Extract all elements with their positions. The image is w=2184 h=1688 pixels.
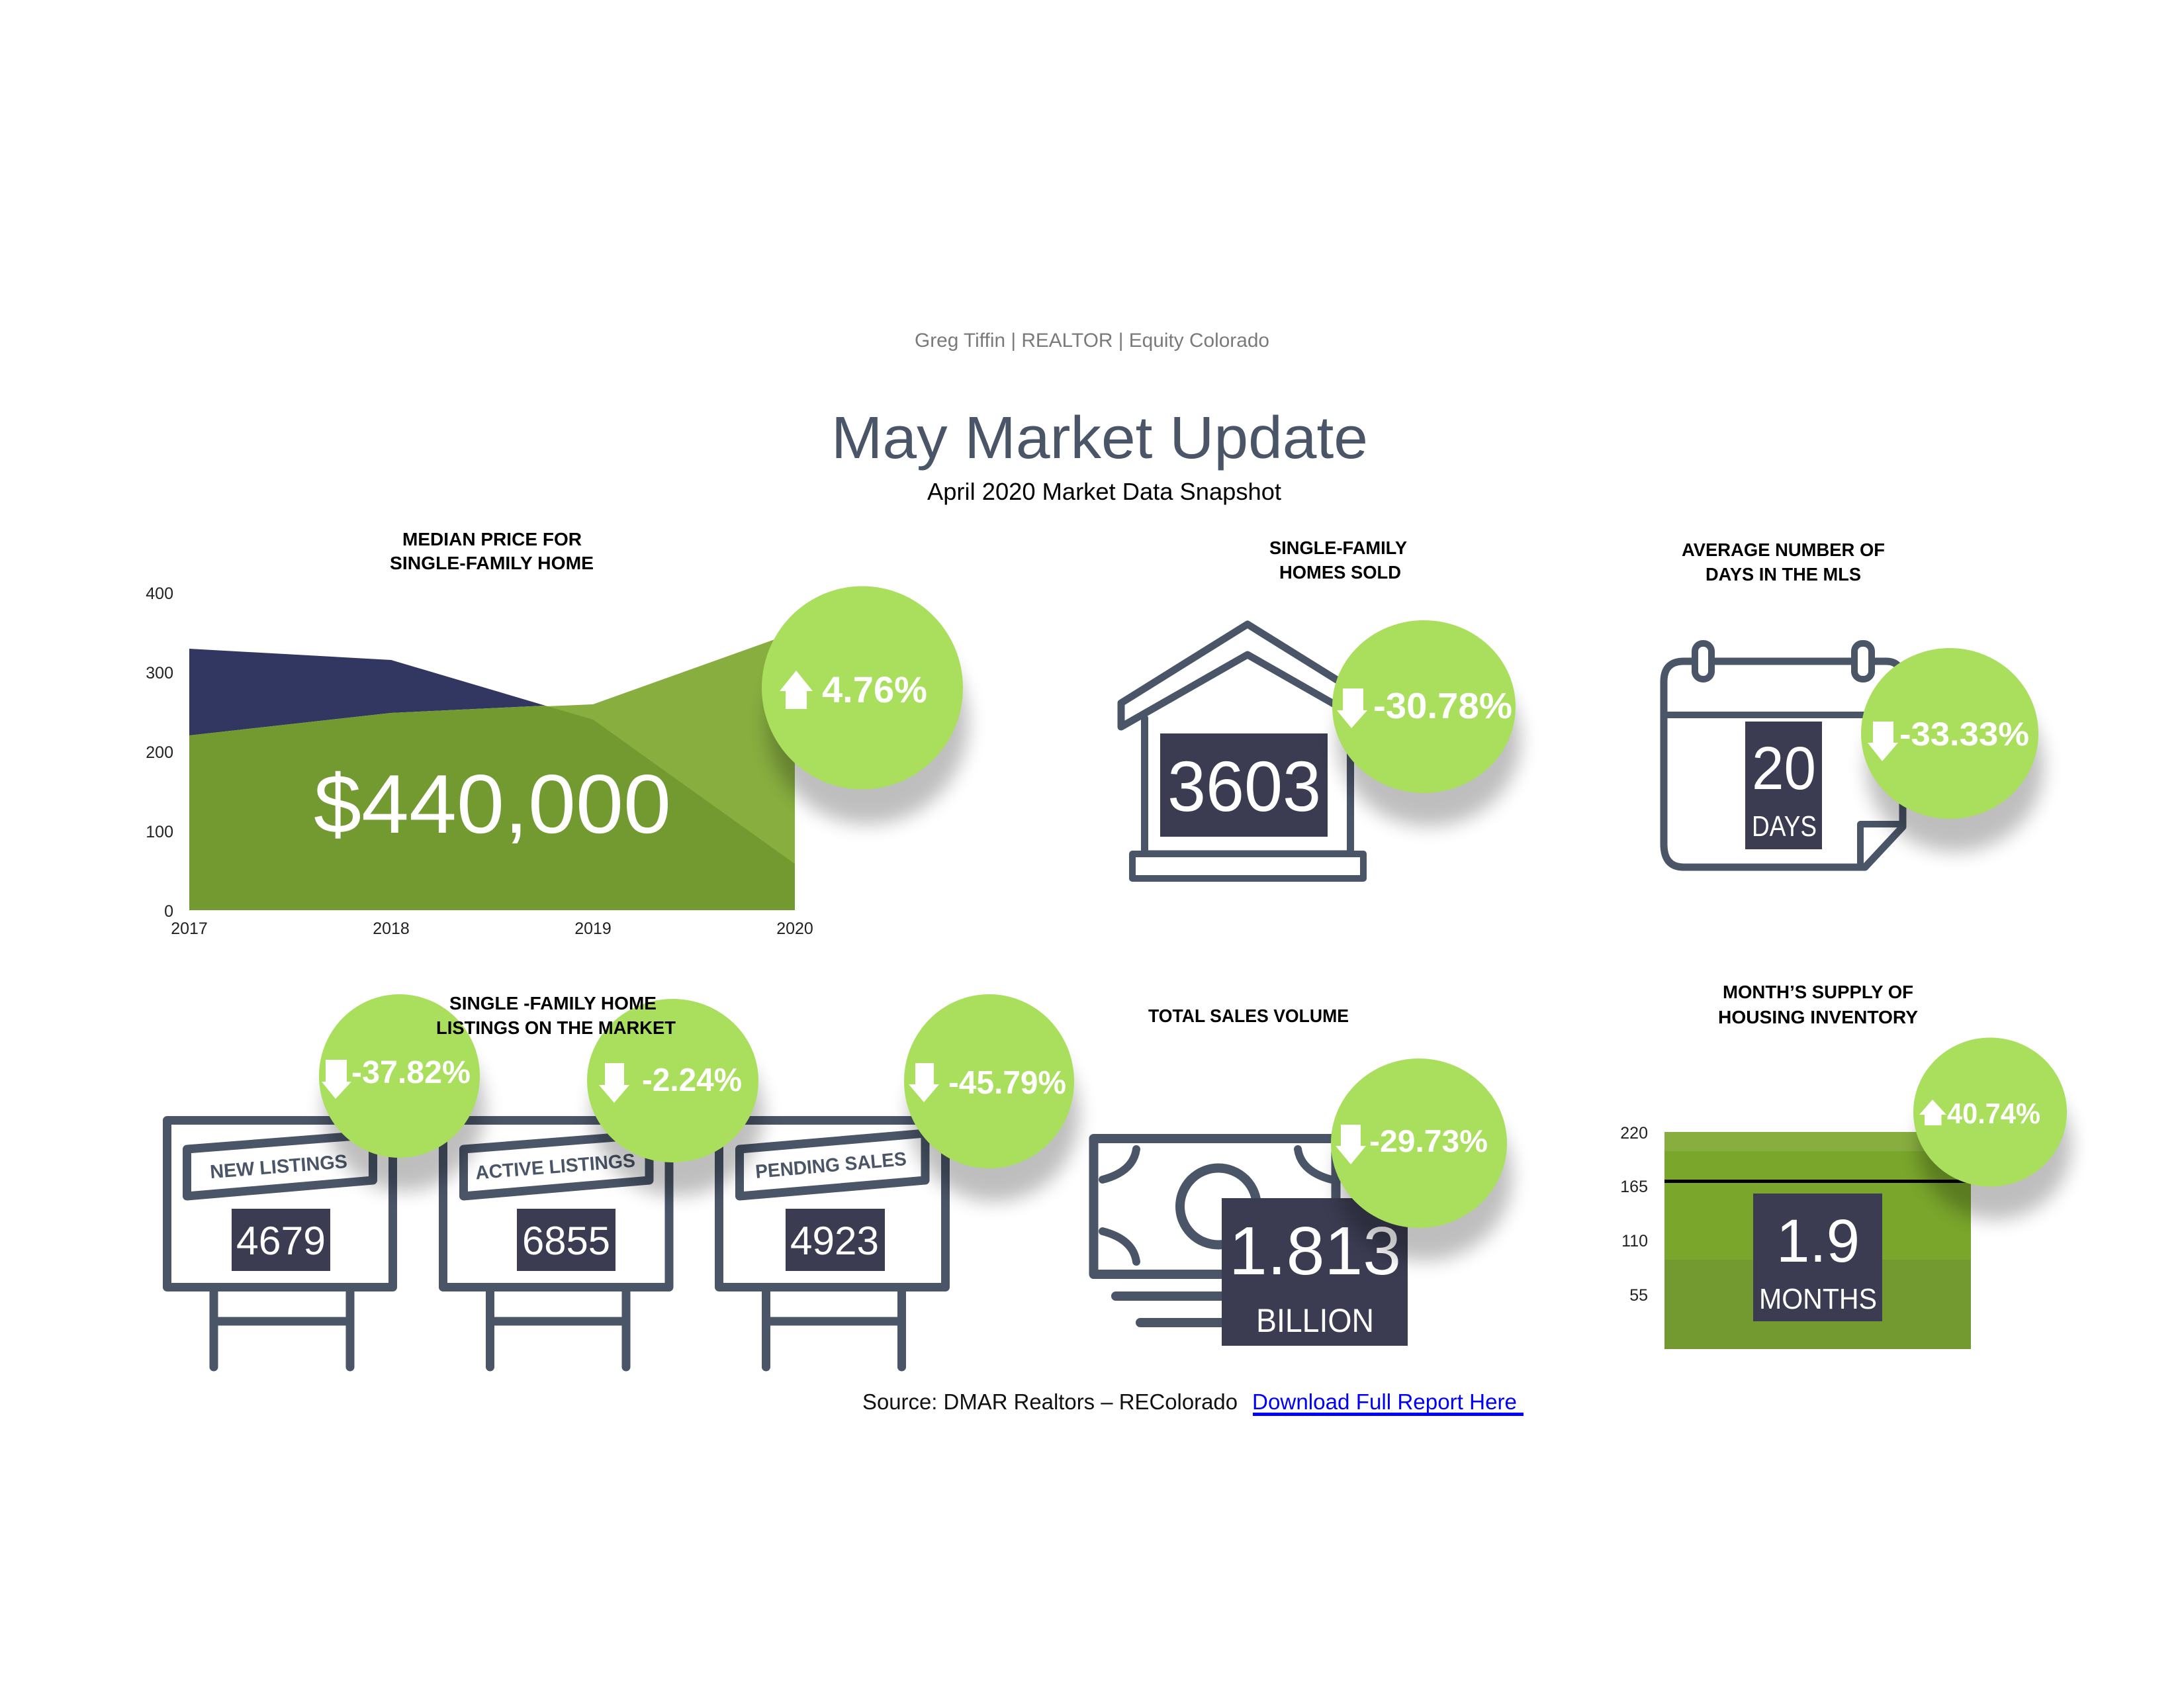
y axis labels: 0 bbox=[164, 902, 173, 921]
y axis labels bbox=[1620, 1124, 1648, 1305]
source line bbox=[862, 1389, 1524, 1416]
badge: sales volume change bbox=[1331, 1058, 1512, 1261]
bar chart bbox=[1664, 1132, 1971, 1349]
x axis labels: 2020 bbox=[776, 919, 813, 938]
heading: homes sold bbox=[1269, 538, 1407, 583]
change value: -29.73% bbox=[1369, 1123, 1488, 1158]
change value: -2.24% bbox=[642, 1062, 742, 1098]
icon: pending sales sign: 4923 bbox=[790, 1219, 879, 1263]
change value: -37.82% bbox=[351, 1055, 471, 1090]
icon: active listings sign: 6855 bbox=[522, 1219, 610, 1263]
change value: 40.74% bbox=[1947, 1098, 2040, 1130]
icon: new listings sign: NEW LISTINGS bbox=[209, 1151, 348, 1183]
heading: homes sold: SINGLE-FAMILY bbox=[1269, 538, 1407, 558]
icon: pending sales sign: PENDING SALES bbox=[754, 1149, 907, 1183]
arrow: down bbox=[909, 1063, 939, 1102]
value box: 1.9 months: MONTHS bbox=[1759, 1283, 1877, 1315]
heading: months supply: HOUSING INVENTORY bbox=[1718, 1007, 1918, 1027]
change value: -30.78% bbox=[1373, 685, 1512, 726]
report link: Download Full Report Here bbox=[1252, 1389, 1517, 1414]
icon: calendar bbox=[1664, 643, 1903, 867]
arrow: up bbox=[780, 671, 813, 709]
value box: 1.813 billion bbox=[1222, 1198, 1408, 1346]
badge: months supply change bbox=[1913, 1038, 2071, 1219]
source line: Source: DMAR Realtors – REColorado bbox=[862, 1389, 1238, 1414]
value box: 20 days: DAYS bbox=[1752, 810, 1817, 843]
arrow: down bbox=[599, 1063, 629, 1103]
value box: 20 days: 20 bbox=[1752, 735, 1816, 802]
value box: 1.9 months bbox=[1753, 1194, 1882, 1321]
y axis labels: 200 bbox=[146, 743, 173, 762]
icon: money bill bbox=[1093, 1139, 1336, 1323]
panel: median price bbox=[146, 529, 968, 938]
heading: listings: SINGLE -FAMILY HOME bbox=[449, 993, 657, 1013]
panel: months supply bbox=[1620, 982, 2071, 1349]
y axis labels: 110 bbox=[1621, 1232, 1648, 1250]
heading: days in MLS bbox=[1682, 539, 1885, 585]
y axis labels: 165 bbox=[1620, 1178, 1648, 1196]
panel: listings bbox=[167, 993, 1079, 1367]
change value: -33.33% bbox=[1899, 716, 2029, 753]
x axis labels: 2019 bbox=[574, 919, 612, 938]
arrow: down bbox=[1336, 1125, 1366, 1164]
y axis labels: 400 bbox=[146, 585, 173, 603]
price value: $440,000 bbox=[314, 757, 671, 851]
icon: active listings sign: ACTIVE LISTINGS bbox=[475, 1150, 636, 1184]
author line: Greg Tiffin | REALTOR | Equity Colorado bbox=[915, 330, 1269, 352]
icon: active listings sign bbox=[443, 1120, 669, 1367]
heading: sales volume: TOTAL SALES VOLUME bbox=[1148, 1006, 1349, 1026]
arrow: down bbox=[322, 1060, 351, 1099]
value box: 3603: 3603 bbox=[1167, 746, 1321, 826]
badge: active listings change bbox=[587, 999, 764, 1196]
heading: median price bbox=[390, 529, 594, 573]
badge: homes sold change bbox=[1332, 620, 1521, 826]
area chart bbox=[189, 632, 795, 910]
panel: days in MLS bbox=[1664, 539, 2044, 867]
panel: total sales volume bbox=[1093, 1006, 1512, 1346]
icon: pending sales sign bbox=[719, 1120, 945, 1367]
badge: price change bbox=[762, 586, 968, 825]
x axis labels bbox=[171, 919, 813, 938]
arrow: down bbox=[1868, 722, 1898, 761]
subtitle: April 2020 Market Data Snapshot bbox=[927, 478, 1281, 505]
heading: homes sold: HOMES SOLD bbox=[1279, 562, 1401, 583]
badge: days change bbox=[1861, 648, 2044, 852]
y axis labels: 55 bbox=[1629, 1286, 1648, 1305]
header bbox=[831, 330, 1368, 505]
y axis labels: 220 bbox=[1620, 1124, 1648, 1143]
x axis labels: 2017 bbox=[171, 919, 208, 938]
value box: 1.9 months: 1.9 bbox=[1776, 1207, 1860, 1275]
y axis labels: 100 bbox=[146, 823, 173, 841]
x axis labels: 2018 bbox=[373, 919, 410, 938]
arrow: up bbox=[1919, 1100, 1946, 1125]
title: May Market Update bbox=[831, 405, 1368, 471]
value box: 20 days bbox=[1745, 722, 1822, 849]
icon: house bbox=[1121, 624, 1374, 878]
change value: -45.79% bbox=[948, 1065, 1066, 1101]
change value: 4.76% bbox=[822, 669, 927, 710]
badge: pending sales change bbox=[904, 994, 1079, 1202]
heading: listings bbox=[436, 993, 676, 1038]
icon: new listings sign: 4679 bbox=[236, 1219, 326, 1263]
heading: days in MLS: DAYS IN THE MLS bbox=[1706, 564, 1861, 585]
panel: homes sold bbox=[1121, 538, 1521, 878]
heading: median price: MEDIAN PRICE FOR bbox=[402, 529, 582, 549]
y axis labels: 300 bbox=[146, 664, 173, 682]
icon: new listings sign bbox=[167, 1120, 393, 1367]
y axis labels bbox=[146, 585, 173, 921]
arrow: down bbox=[1337, 688, 1367, 728]
value box: 1.813 billion: BILLION bbox=[1256, 1302, 1374, 1339]
heading: listings: LISTINGS ON THE MARKET bbox=[436, 1017, 676, 1038]
heading: months supply: MONTH’S SUPPLY OF bbox=[1723, 982, 1913, 1002]
heading: months supply bbox=[1718, 982, 1918, 1027]
heading: median price: SINGLE-FAMILY HOME bbox=[390, 553, 594, 573]
heading: days in MLS: AVERAGE NUMBER OF bbox=[1682, 539, 1885, 560]
badge: new listings change bbox=[319, 994, 484, 1192]
value box: 1.813 billion: 1.813 bbox=[1229, 1213, 1401, 1289]
